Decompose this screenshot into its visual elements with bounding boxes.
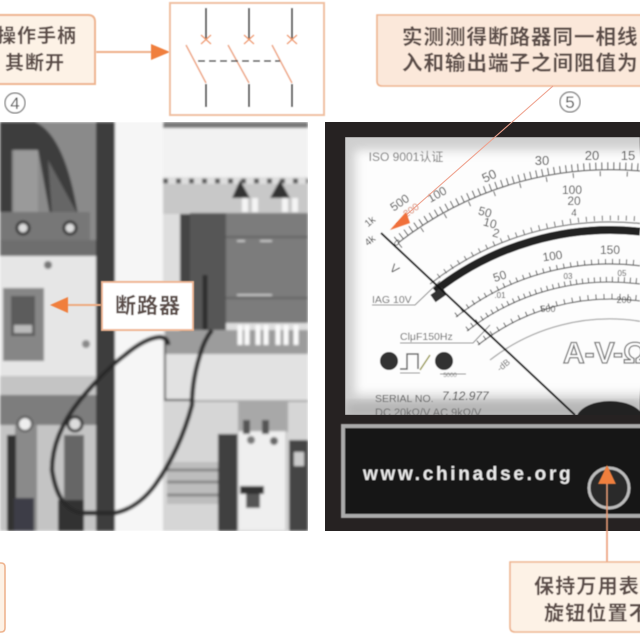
scale numbers: 20 (585, 148, 599, 163)
top right duct (163, 122, 308, 214)
scale numbers: 30 (535, 153, 549, 168)
pointer needle (381, 233, 575, 415)
din rail (167, 462, 222, 504)
scale numbers: 20 (567, 194, 581, 208)
bottom shadow (345, 402, 640, 418)
scale numbers: 100 (425, 183, 449, 206)
dB mark: -dB (495, 357, 512, 374)
PLC module (180, 213, 308, 334)
miniature breaker (218, 402, 308, 531)
scale numbers: 500 (540, 304, 556, 314)
needle pivot cover (577, 400, 640, 415)
lead line from callout to scale (396, 86, 553, 224)
arrow: callout to circuit symbol (96, 44, 170, 60)
scale numbers: 2 (491, 226, 501, 241)
callout: measured resistance: 入和输出端子之间阻值为 (402, 51, 638, 75)
scale numbers (363, 148, 635, 314)
scale numbers: V (387, 261, 402, 277)
label: circuit breaker: 断路器 (115, 295, 181, 318)
capacitance label (400, 325, 490, 343)
panel: three-pole breaker symbol (170, 3, 324, 115)
website plate: www.chinadse.org (362, 464, 573, 485)
top-left cables and terminals (0, 122, 96, 256)
meter housing (325, 122, 640, 531)
callout: operate handle to open: 其断开 (5, 52, 65, 74)
AC 10V label: IAG 10V (372, 294, 412, 306)
scale numbers: 50 (491, 267, 509, 285)
scale numbers: 03 (564, 272, 573, 281)
relay terminals (165, 325, 308, 354)
mounting panel with small breaker (2, 258, 94, 362)
callout: keep multimeter knob position: 保持万用表 (534, 575, 640, 598)
step number 5: 5 (565, 93, 575, 112)
arrow: label to breaker (50, 297, 101, 313)
serial number: 7.12.977 (442, 389, 490, 403)
callout: keep multimeter knob position (510, 562, 640, 632)
step number 4: 4 (10, 94, 20, 113)
callout: measured resistance: 实测测得断路器同一相线 (402, 25, 638, 49)
vertical cabinet post (96, 122, 115, 531)
photo: multimeter (325, 86, 640, 531)
white wiring duct (115, 122, 163, 531)
scale numbers: 500 (387, 191, 412, 214)
label: circuit breaker (102, 282, 193, 330)
adjust sockets and symbol (380, 352, 466, 379)
test leads wire (52, 330, 212, 513)
scale numbers: .01 (494, 291, 506, 300)
dial face (345, 137, 640, 439)
lower panel (163, 354, 308, 400)
scale numbers: 05 (618, 269, 627, 278)
scale numbers: ISO 9001认证 (369, 150, 443, 164)
lower terminals and cables (0, 376, 97, 531)
scale numbers: 4k (363, 233, 379, 249)
step number 4 (5, 93, 25, 113)
serial number (375, 391, 490, 415)
scale numbers: 0 (392, 237, 402, 248)
scale numbers: 50 (477, 204, 494, 221)
arrow: knob hold callout to knob (598, 465, 616, 563)
scale numbers: 4 (571, 208, 577, 219)
scale numbers: 200 (402, 201, 422, 220)
callout edge bottom left (0, 563, 5, 632)
photo: control cabinet with breaker (0, 122, 308, 531)
scale numbers: 200 (616, 295, 632, 305)
scale numbers: 150 (600, 243, 620, 257)
serial number: SERIAL NO. (375, 393, 434, 405)
scale numbers: 50 (479, 166, 499, 186)
scale arcs (396, 166, 640, 360)
scale numbers: 1k (363, 214, 379, 230)
scale numbers: 100 (542, 248, 564, 264)
callout: operate handle to open (0, 15, 95, 84)
AC 10V label (372, 281, 440, 306)
callout: measured resistance (377, 15, 640, 86)
adjust sockets and symbol: 5000 (443, 373, 457, 379)
serial number: DC 20kΩ/V AC 9kΩ/V (375, 407, 482, 419)
scale numbers: 100 (562, 183, 582, 197)
step number 5 (560, 92, 580, 112)
scale numbers: 10 (482, 215, 499, 232)
range block on band (430, 287, 447, 302)
capacitance label: ClμF150Hz (400, 331, 453, 343)
scale numbers: 15 (621, 148, 635, 163)
website plate (343, 426, 640, 516)
arrow head on ohm scale (390, 212, 410, 230)
